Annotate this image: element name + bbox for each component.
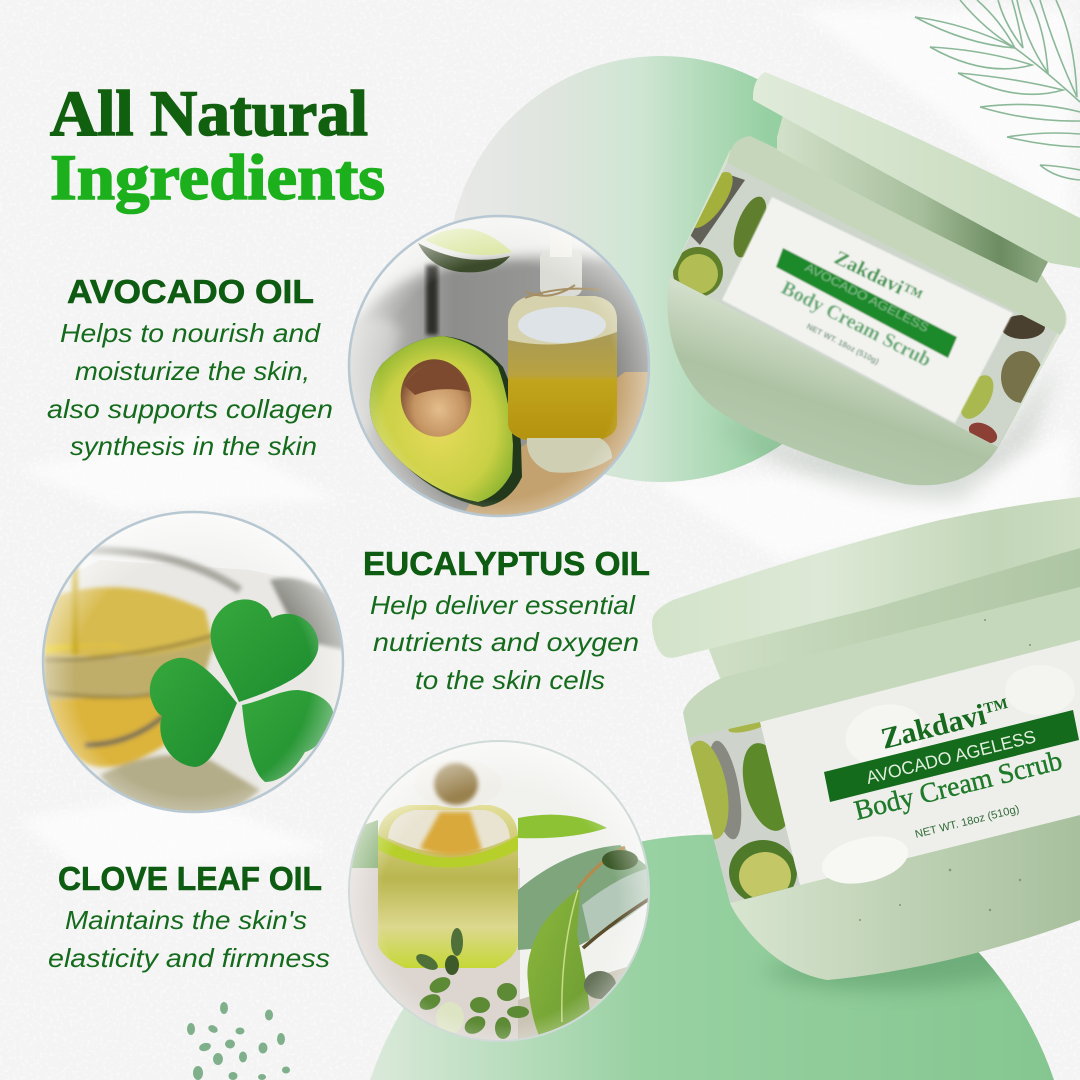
- text block: eucalyptus oil: [363, 545, 650, 695]
- oil bottle: [508, 232, 617, 473]
- description: clove leaf oil: Maintains the skin's: [65, 905, 307, 935]
- description: clove leaf oil: [48, 905, 330, 973]
- label weight text: NET WT. 18oz (510g): [914, 803, 1021, 841]
- photo circle: avocado and oil: [340, 210, 660, 522]
- product label: [760, 640, 1080, 891]
- photo circle: clover and oil: [43, 512, 345, 815]
- avocado half: [370, 336, 522, 507]
- label brand text: TM: [982, 696, 1010, 717]
- jar lid neck: [777, 115, 1050, 283]
- description: avocado oil: Helps to nourish and: [60, 318, 322, 348]
- heading: eucalyptus oil: EUCALYPTUS OIL: [363, 545, 650, 582]
- label green strip: [824, 710, 1079, 802]
- jar body: [683, 582, 1080, 980]
- label product text: AVOCADO AGELESS: [864, 726, 1038, 788]
- description: avocado oil: synthesis in the skin: [70, 431, 317, 461]
- text block: avocado oil: [47, 273, 333, 461]
- label brand text: Zakdavi™: [831, 247, 926, 308]
- clover leaves: [150, 599, 333, 782]
- label window: [670, 164, 1057, 447]
- oil in bowl: [43, 560, 260, 815]
- description: avocado oil: also supports collagen: [47, 394, 333, 424]
- text block: clove leaf oil: [48, 860, 330, 973]
- jar shoulder: [727, 136, 1066, 335]
- decorative dots: [187, 1002, 290, 1080]
- heading: avocado oil: AVOCADO OIL: [67, 273, 314, 310]
- jar lid neck: [708, 548, 1080, 678]
- description: eucalyptus oil: to the skin cells: [415, 665, 605, 695]
- label product text: AVOCADO AGELESS: [803, 260, 931, 335]
- icon: palm leaf: [915, 0, 1080, 180]
- label name text: Body Cream Scrub: [851, 745, 1065, 827]
- jar lid: [753, 72, 1080, 268]
- description: avocado oil: [47, 318, 333, 461]
- oil bottle: [378, 760, 518, 968]
- description: eucalyptus oil: nutrients and oxygen: [373, 627, 639, 657]
- label weight text: NET WT. 18oz (510g): [805, 322, 881, 366]
- description: avocado oil: moisturize the skin,: [75, 356, 310, 386]
- jar lid: [652, 497, 1080, 658]
- label window: [688, 722, 800, 903]
- description: eucalyptus oil: [370, 590, 639, 695]
- title line 2: Ingredients: [50, 142, 385, 214]
- label brand text: Zakdavi: [878, 698, 989, 756]
- product jar: top: [660, 72, 1080, 500]
- label name text: Body Cream Scrub: [778, 277, 935, 371]
- photo circle: eucalyptus and oil: [349, 741, 652, 1043]
- description: eucalyptus oil: Help deliver essential: [370, 590, 636, 620]
- title line 1: All Natural: [50, 78, 368, 150]
- eucalyptus buds: [414, 928, 529, 1039]
- jar shadow: [770, 952, 1003, 996]
- title: [50, 78, 385, 214]
- heading: clove leaf oil: CLOVE LEAF OIL: [58, 860, 322, 897]
- eucalyptus leaves: [350, 815, 652, 1038]
- jar body: [667, 150, 1067, 485]
- jar speckles: [849, 619, 1031, 921]
- label green strip: [776, 248, 957, 358]
- jar lower band: [730, 815, 1080, 980]
- product jar: bottom: [652, 497, 1080, 990]
- background circle: bottom: [370, 835, 1054, 1080]
- background circle: top: [448, 56, 874, 482]
- product label: [722, 197, 1013, 423]
- avocado background half: [418, 228, 512, 272]
- jar shadow: [710, 360, 1060, 500]
- description: clove leaf oil: elasticity and firmness: [48, 943, 330, 973]
